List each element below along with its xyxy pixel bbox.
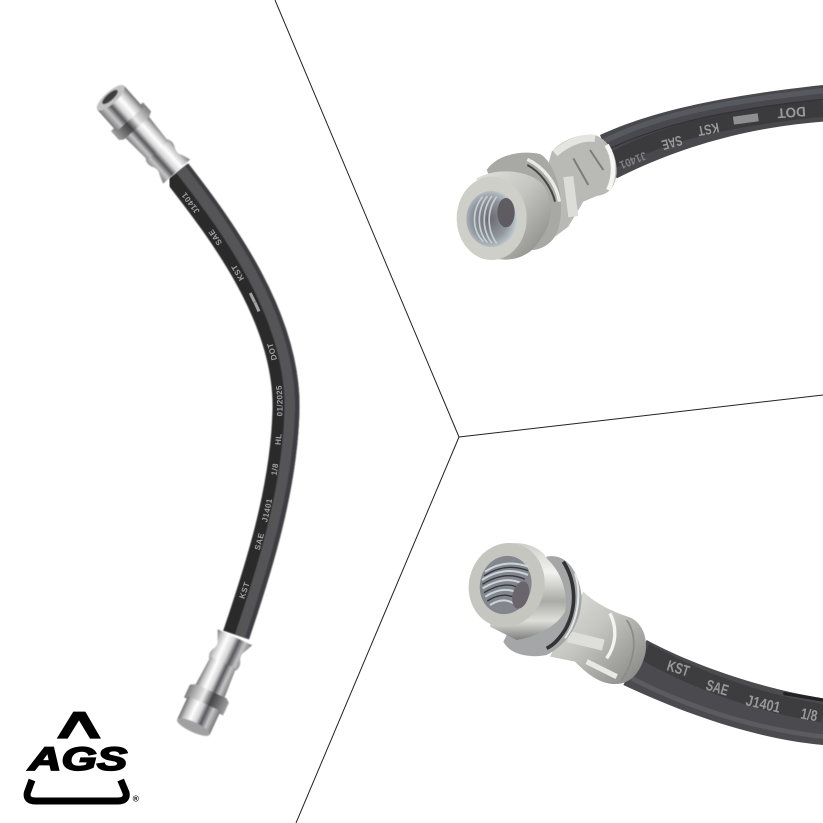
threaded bore [473, 550, 538, 620]
hose lettering: KST [231, 266, 244, 281]
end face [457, 177, 527, 260]
hose lettering: 1/8 [271, 464, 278, 476]
hose lettering: ▬▬ [248, 292, 260, 312]
collar [503, 556, 582, 656]
logo base [27, 780, 126, 801]
hose lettering [182, 192, 283, 599]
AGS logo [27, 712, 140, 803]
top fitting [90, 79, 192, 186]
hose lettering: J1401 [618, 149, 648, 170]
hose lettering: KST [696, 120, 720, 140]
nose [490, 543, 566, 640]
hose lettering: SAE [254, 533, 264, 550]
hose [600, 85, 823, 178]
logo wordmark: AGS [27, 740, 128, 777]
hose lettering: 01/2025 [276, 386, 283, 416]
nose [473, 171, 551, 260]
hose lettering: KST [665, 658, 692, 681]
full hose photo [96, 84, 300, 736]
close-up: top right fitting [457, 85, 823, 260]
hose lettering: 1/8 [799, 706, 819, 725]
hose lettering: J1401 [182, 192, 200, 213]
hose lettering: SAE [660, 132, 684, 154]
close-up: bottom right fitting [459, 534, 823, 745]
hose lettering [665, 658, 819, 725]
hose lettering: SAE [704, 677, 730, 700]
hose body [176, 165, 297, 638]
crimp [550, 592, 646, 684]
end face [459, 534, 554, 636]
divider lines [275, 0, 823, 823]
registered mark: ® [133, 793, 140, 803]
hose lettering: DOT [267, 344, 277, 360]
hose [623, 640, 823, 745]
threaded bore [466, 191, 517, 247]
hose lettering: DOT [776, 104, 806, 122]
bottom fitting [172, 628, 255, 741]
crimp [547, 135, 617, 237]
collar [487, 153, 561, 250]
hose lettering: SAE [208, 229, 222, 246]
logo chevron [57, 712, 101, 739]
hose lettering [618, 104, 806, 170]
hose lettering: J1401 [262, 500, 272, 522]
hose lettering: HL [275, 434, 282, 445]
hose lettering: J1401 [744, 692, 782, 717]
hose lettering: KST [239, 582, 249, 599]
